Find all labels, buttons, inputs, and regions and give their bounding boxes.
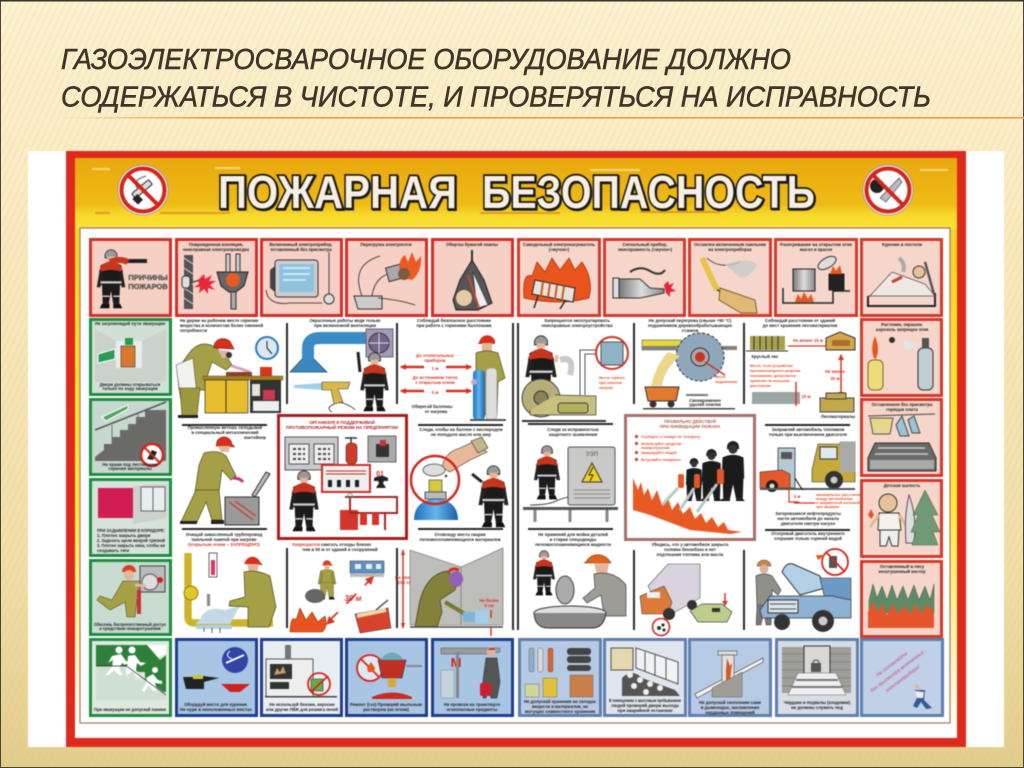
figure: firefighter: [360, 353, 389, 411]
diagram: distance layout: Лесоматериалы: [821, 414, 856, 419]
diagram: distance layout: 15 м: [801, 394, 811, 399]
panel: smoke in corridor: ПРИ ЗАДЫМЛЕНИИ В КОРИДОРЕ:: [97, 528, 166, 533]
distance notes: [400, 353, 472, 414]
caption: при работе с горючими баллонами: [416, 323, 492, 328]
list: пожаротушения: [641, 446, 670, 450]
panel: smoking in bed: [862, 240, 942, 316]
panel: storing cylinders: могущих совместного хранения: [525, 709, 595, 714]
icon: no open flame sign: [863, 165, 913, 215]
evacuation plan: [285, 437, 338, 470]
slide title: СОДЕРЖАТЬСЯ В ЧИСТОТЕ, И ПРОВЕРЯТЬСЯ НА ИСПРАВНОСТЬ: [61, 82, 931, 114]
caption: Убедись, что у автомобиля закрыта: [652, 542, 729, 547]
diagram: distance layout: хранение на меньшем: [750, 379, 790, 383]
panel: damaged wiring: Поврежденная изоляция,: [189, 242, 243, 247]
panel: candle and aerosol: аэрозоль запрещен огня: [876, 327, 929, 332]
caption: неисправные электроустройства: [541, 323, 613, 328]
panel: clothes over stove: [862, 400, 942, 476]
scene: do not bring flammables to workplace: [176, 318, 283, 418]
caption below: сгорания только горячей водой: [774, 536, 842, 541]
illustration: washing bowl: [534, 576, 606, 628]
callout: control panel: при опасном: [599, 381, 622, 385]
panel: attic chimney: Не допускай скопления сажи: [699, 700, 761, 705]
diagram: distance layout: Круглый лес: [752, 354, 779, 359]
caption below: Загоревшиеся нефтепродукты: [775, 511, 841, 516]
figure: firefighter: [534, 446, 560, 499]
panel: heating paints on fire: [776, 240, 856, 316]
scene: fire distances for forest: [746, 318, 856, 419]
panel: candle and aerosol: [862, 320, 942, 396]
poster heading: БЕЗОПАСНОСТЬ: [482, 166, 815, 218]
distance notes: Оберегай баллоны: [412, 404, 453, 409]
panel: spray note: электроприборы!: [885, 664, 922, 694]
caption: не попадало масло или жир: [431, 432, 491, 437]
panel: crowded hall: В помещениях с массовым пребыванием: [609, 698, 681, 703]
caption below: Отогревай двигатель внутреннего: [771, 531, 845, 536]
panel: clothes over stove: горящая плита: [886, 407, 918, 412]
panel: storing cylinders: веществ и материалов, не: [532, 704, 589, 709]
panel: paper-wrapped lamp: [432, 240, 512, 316]
caption: [188, 425, 266, 440]
scene: check cylinder leak: [411, 427, 508, 542]
panel: correct extinguishing: ПРИ ЛИКВИДАЦИИ ПОЖАРА: [660, 424, 720, 429]
illustration: saw: [642, 333, 738, 386]
panel: soldering iron: [690, 240, 770, 316]
slide title: [61, 44, 931, 114]
caption: [547, 427, 599, 437]
caption: [648, 318, 733, 333]
caption: [652, 542, 729, 557]
panel: smoking area: Не кури в неположенных местах: [180, 707, 253, 712]
panel: storing cylinders: Не допускай хранения на складах: [524, 699, 597, 704]
caption: Следи за исправностью: [547, 427, 599, 432]
distance notes: До отопительных: [416, 353, 455, 358]
list: Используйте средства: [641, 442, 682, 446]
scene: truck fuel leak: [640, 542, 732, 636]
illustration: truck: [640, 564, 700, 620]
caption: головка бензобака и нет: [664, 547, 716, 552]
poster heading: [218, 166, 815, 218]
caption: [419, 427, 503, 437]
panel: unattended TV: Включенный электроприбор,: [270, 242, 332, 247]
panel: forest fire: незатушенный костер: [879, 569, 926, 574]
panel: evacuation: При эвакуации не допускай паники: [94, 707, 166, 712]
distance arrow: 30 м: [344, 594, 362, 603]
caption: в специальный металлический: [191, 430, 259, 435]
figure: worker: [756, 560, 781, 625]
illustration: fuel pump and truck: [760, 442, 855, 492]
illustration: sawdust cart: Своевременно: [689, 398, 721, 403]
poster: [28, 151, 1004, 747]
panel: subway: [432, 640, 512, 716]
caption below: части автомобиля до начала: [777, 516, 839, 521]
diagram: distance layout: [746, 332, 856, 419]
panel: gas cylinder stove: раствором (не огнем): [363, 707, 409, 712]
caption below: Отовсюду места сварки: [434, 532, 486, 537]
panel: smoking area: [176, 640, 256, 716]
illustration: worker with cylinders: [470, 335, 506, 421]
panel: no gasoline stove: [262, 640, 342, 716]
panel: fire organisation: [278, 416, 406, 538]
illustration: saw: Место: [715, 375, 727, 379]
caption: Не держи на рабочем месте горючие: [180, 318, 259, 323]
panel: gas cylinder stove: Ремонт (газ) Проверяй мыльным: [350, 702, 422, 707]
illustration: flames: [633, 478, 742, 534]
caption below: Не применяй для мойки деталей: [538, 532, 608, 537]
caption: подшипников деревообрабатывающих: [648, 323, 733, 328]
icon: extinguisher: [345, 437, 357, 464]
panel: causes of fires title: ПРИЧИНЫ: [128, 273, 168, 282]
diagram: distance layout: Не менее: [825, 369, 845, 374]
instruction card: [322, 465, 370, 492]
panel: unattended TV: [262, 240, 342, 316]
caption: [180, 318, 263, 333]
icon: no smoking sign: [118, 165, 168, 215]
scene: washing parts: [533, 551, 626, 628]
list: [635, 435, 700, 462]
illustration: saw: подшипника: [715, 380, 738, 384]
figure: worker: [583, 555, 626, 616]
caption: Запрещается: [292, 542, 321, 547]
panel: soldering iron: Оставлен включенным паяльник: [694, 242, 767, 247]
panel: smoke in corridor: 3. Плотно закрыть окна, чтобы не: [97, 543, 166, 548]
panel: subway: огнеопасные предметы: [447, 707, 498, 712]
divider lines: [182, 323, 850, 630]
caption: защитного заземления: [549, 432, 598, 437]
distance notes: приборов: [424, 358, 446, 363]
scene: refuel with engine off: [760, 427, 862, 541]
panel: attic chimney: в дымоходах, захламления: [701, 705, 760, 710]
panel: exit route: Двери должны открываться: [100, 382, 161, 387]
panel: soldering iron: на электроприборах: [708, 247, 752, 252]
icon: box of waste: [355, 600, 391, 633]
slide title: ГАЗОЭЛЕКТРОСВАРОЧНОЕ ОБОРУДОВАНИЕ ДОЛЖНО: [61, 44, 791, 76]
caption: [309, 318, 381, 328]
panel: overloaded socket: Перегрузка электросети: [360, 242, 412, 247]
panel: smoke in corridor: 1. Плотно закрыть двери: [97, 533, 151, 538]
callout: control panel: нагреве: [599, 386, 613, 390]
panel: smoke in corridor: создавать тяги: [97, 548, 130, 553]
panel: crowded hall: при аварийной остановке: [617, 708, 673, 713]
scene: ventilation and spray gun: [290, 318, 393, 412]
caption: чем в 50 м от зданий и сооружений: [302, 547, 378, 552]
panel: fire alarm: [90, 560, 170, 634]
caption: до мест хранения лесоматериалов: [763, 323, 838, 328]
panel: crowded hall: [604, 640, 686, 716]
panel: stairs: [90, 400, 170, 474]
icon: no open flame: [816, 549, 848, 575]
panel: heating paints on fire: Разогревание на открытом огне: [780, 242, 853, 247]
illustration: fuel tank: [690, 593, 732, 622]
illustration: hand on cylinder: [411, 437, 488, 520]
distance notes: с открытым огнем: [415, 380, 455, 385]
callout: control panel: Место горячее: [599, 376, 625, 380]
panel: gas cylinder stove: [346, 640, 426, 716]
caption: Соблюдай расстояние от зданий: [765, 318, 835, 323]
caption: потребности: [180, 328, 207, 333]
panel: attic chimney: чердачных помещений: [705, 710, 755, 715]
panel: faulty fuse: Сигнальный прибор,: [623, 242, 667, 247]
figure: welder: [410, 569, 503, 627]
diagram: distance layout: невозможно, допускается: [750, 374, 796, 378]
panel: overloaded socket: [346, 240, 426, 316]
distance notes: 5 м: [432, 390, 438, 395]
panel: correct extinguishing: [626, 416, 754, 540]
panel: crowded hall: людей проверяй двери выхода: [611, 703, 679, 708]
scene: protective grounding: [523, 427, 618, 547]
panel: smoke in corridor: [90, 480, 170, 556]
caption below: паяльной лампой при нагреве: [191, 537, 257, 542]
illustration: firefighter and motor: [522, 336, 606, 422]
panel: attic chimney: [690, 640, 770, 716]
panel: fire organisation: ОРГАНИЗУЯ И ПОДДЕРЖИВАЙ: [309, 420, 375, 425]
icon: fire: [290, 608, 326, 632]
panel: paper-wrapped lamp: Обертка бумагой лампы: [446, 242, 498, 247]
panel: stairs: Не храни под лестницами: [102, 462, 158, 467]
icon: building: [350, 561, 384, 577]
height note: [395, 549, 415, 629]
caption: [769, 427, 848, 437]
illustration: sawdust cart: удаляй опилки: [689, 402, 721, 407]
illustration: spray gun: [294, 382, 355, 412]
panel: fire alarm: Обеспечь беспрепятственный доступ: [94, 622, 166, 627]
diagram: distance layout: 30 м: [830, 376, 840, 381]
panel: fire alarm: к средствам пожаротушения: [99, 626, 161, 631]
clearance note: 5 см: [484, 603, 494, 608]
panel: damaged wiring: [176, 240, 256, 316]
panel: stairs: горючие материалы: [108, 466, 152, 471]
diagram: distance layout: Место, если устройство: [750, 364, 793, 368]
caption below: Очищай замасленный трубопровод: [186, 532, 263, 537]
panel: spray note: Не оставляйте: [875, 650, 909, 678]
panel: evacuation: [90, 640, 170, 716]
panel: children with fire: Детская шалость: [884, 483, 921, 488]
clearance note: [479, 598, 499, 636]
caption below: и стирки спецодежды: [550, 537, 597, 542]
caption: Запрещается эксплуатировать: [544, 318, 610, 323]
panel: no gasoline stove: Не используй бензин, керосин: [269, 702, 335, 707]
caption: при включенной вентиляции: [314, 323, 376, 328]
panel: causes of fires title: ПОЖАРОВ: [128, 282, 168, 291]
scene: do not use faulty equipment: [522, 318, 628, 422]
caption below: [186, 532, 263, 547]
panel: candle and aerosol: Растения, окрашен.: [881, 322, 923, 327]
panel: faulty fuse: [604, 240, 684, 316]
icon: telephone: 01: [376, 471, 384, 478]
panel: homemade heater: [518, 240, 600, 316]
panel: spray note: [862, 640, 942, 716]
panel: locked basement: Чердаки и подвалы (кладовки): [784, 700, 851, 705]
caption: Промасленную ветошь складывай: [188, 425, 263, 430]
distance note: [789, 490, 862, 509]
distance notes: от нагрева: [425, 409, 448, 414]
distance note: минимальное расстояние: [816, 493, 862, 497]
panel: forest fire: [862, 562, 942, 636]
distance note: 3 м: [794, 494, 800, 499]
illustration: worker: [180, 437, 243, 524]
illustration: electrical cabinet: УЗП: [586, 452, 598, 458]
caption below: легковоспламеняющихся материалов: [419, 537, 501, 542]
panel: no gasoline stove: или другие ЛВЖ для розжига печей: [266, 707, 338, 712]
illustration: container: [225, 472, 270, 525]
illustration: sawdust cart: [643, 387, 735, 410]
panel: children with fire: [862, 480, 942, 556]
panel: exit route: [90, 320, 170, 394]
caption below: легковоспламеняющиеся жидкости: [535, 542, 611, 547]
panel: storing cylinders: [520, 640, 600, 716]
list: Эвакуируйте людей: [641, 451, 677, 455]
diagram: distance layout: Не менее 15 м: [793, 338, 823, 343]
panel: smoking area: Оборудуй место для курения.: [184, 702, 248, 707]
panel: exit route: только по ходу эвакуации: [102, 386, 158, 391]
panel: locked basement: не должны служить под: [791, 705, 843, 710]
panel: causes of fires title: [90, 240, 170, 316]
caption: сжигать отходы близко: [321, 542, 371, 547]
clearance note: Не более: [479, 598, 499, 603]
illustration: screens: [410, 548, 503, 625]
distance notes: До источников тепла: [412, 375, 458, 380]
caption: Окрасочные работы веди только: [309, 318, 381, 323]
icon: drops warning: [652, 618, 670, 636]
caption below: [771, 511, 845, 541]
list: Сообщите о пожаре по телефону: [641, 435, 700, 439]
poster frame: [368, 436, 396, 462]
scene: gas pipe thawing: [184, 553, 276, 633]
distance note: и заправочной колонкой: [816, 501, 860, 505]
distance note: при заправке: [816, 505, 840, 509]
caption: станков: [682, 328, 699, 333]
panel: smoking in bed: Курение в постели: [882, 242, 922, 247]
caption: вещества в количестве более сменной: [180, 323, 263, 328]
panel: subway: Не провози на транспорте: [444, 702, 501, 707]
panel: locked basement: [776, 640, 858, 716]
scene: circular saw temperature: [642, 318, 738, 410]
illustration: ventilation hood: [290, 329, 393, 372]
caption: подтекания топлива или масла: [657, 552, 724, 557]
caption: [292, 542, 378, 552]
caption below: [419, 532, 501, 542]
caption: контейнер: [244, 435, 266, 440]
figure: worker with blowtorch: [229, 557, 276, 627]
scene: welding behind screen: [395, 548, 503, 636]
panel: heating paints on fire: масел и красок: [800, 247, 833, 252]
caption below: (открытым огнем – ЗАПРЕЩЕНО): [188, 542, 260, 547]
illustration: worker at desk: [176, 337, 283, 418]
panel: unattended TV: оставленный без присмотра: [270, 247, 332, 252]
panel: exit route: Не загромождай пути эвакуации: [95, 321, 165, 326]
list: Встречайте пожарных: [641, 458, 681, 462]
panel: faulty fuse: неисправность («жучок»): [618, 247, 673, 252]
panel: damaged wiring: неисправная электропроводка: [183, 247, 250, 252]
panel: spray note: без присмотра включенные: [869, 649, 926, 694]
figure: firefighter: [289, 471, 319, 531]
figure: worker with cart: [305, 560, 336, 603]
caption: Не допускай перегрева (свыше +90 °С): [649, 318, 732, 323]
scene: soaked rags: [180, 425, 270, 547]
poster heading: ПОЖАРНАЯ: [218, 166, 457, 218]
height note: Не менее: [395, 575, 415, 580]
figures: firefighters with extinguishers: [662, 441, 745, 512]
caption: только при выключенном двигателе: [769, 432, 848, 437]
figure: firefighter: [533, 551, 555, 595]
fire stand: [340, 494, 397, 530]
figure: firefighter: [472, 466, 508, 527]
panel: subway: М: [451, 655, 461, 670]
caption: [763, 318, 838, 328]
scene: burning waste: [290, 542, 391, 633]
diagram: distance layout: противопожарного разрыва: [750, 369, 801, 373]
caption below: двигателя смотри насухо: [781, 521, 836, 526]
panel: correct extinguishing: ПРАВИЛЬНО ДЕЙСТВУЙ: [664, 419, 716, 424]
scene: safe distance from cylinders: [400, 318, 506, 421]
height note: 200 см: [398, 580, 412, 585]
panel: forest fire: Оставленный в лесу: [880, 564, 925, 569]
callout: control panel: [580, 337, 628, 395]
caption: Следи, чтобы на баллон с кислородом: [419, 427, 503, 432]
caption below: [535, 532, 611, 547]
panel: clothes over stove: Оставленное без присмотра: [872, 402, 933, 407]
scene: engine repair: [756, 549, 851, 632]
illustration: blue truck: [760, 564, 851, 632]
panel: homemade heater: («жучок»): [549, 247, 570, 252]
panel: fire organisation: ПРОТИВОПОЖАРНЫЙ РЕЖИМ НА ПРЕДПРИЯТИИ: [286, 425, 398, 430]
caption: Заправляй автомобиль топливом: [772, 427, 844, 432]
caption: [541, 318, 613, 328]
caption: [416, 318, 492, 328]
distance note: между автомобилем: [816, 497, 853, 501]
diagram: distance layout: расстоянии: [750, 384, 771, 388]
caption: Соблюдай безопасное расстояние: [417, 318, 492, 323]
distance notes: 1 м: [432, 366, 438, 371]
panel: smoke in corridor: 2. Заделать щели мокрой тряпкой: [97, 538, 165, 543]
panel: homemade heater: Самодельный электронагреватель: [523, 242, 595, 247]
